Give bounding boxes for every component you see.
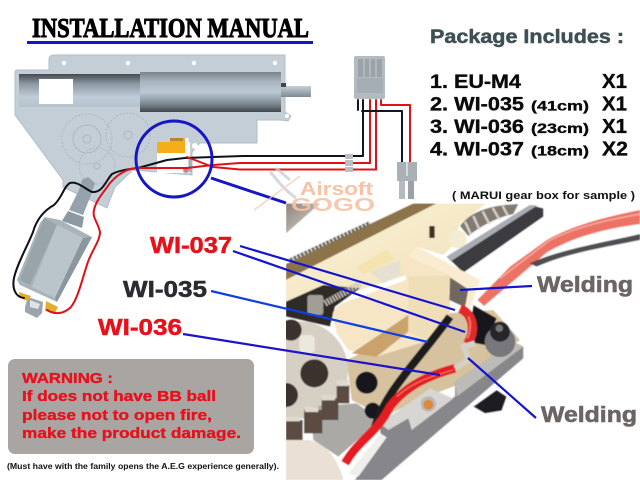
diagram: main connector xyxy=(354,56,385,99)
footer note: (Must have with the family opens the A.E.G experience generally). xyxy=(7,461,279,471)
label: WI-036: WI-036 xyxy=(98,314,182,340)
warning panel: please not to open fire, xyxy=(22,407,212,424)
photo of wired gearbox xyxy=(251,203,640,480)
diagram: motor xyxy=(17,177,95,318)
diagram: small connector xyxy=(397,162,417,199)
watermark: Airsoft GOGO xyxy=(291,179,375,215)
package list: (23cm) xyxy=(531,120,589,136)
package list: X1 xyxy=(602,71,627,93)
watermark: Airsoft GOGO: GOGO xyxy=(291,195,375,215)
label: WI-037: WI-037 xyxy=(150,232,232,258)
warning panel: make the product damage. xyxy=(22,425,241,442)
package list: X2 xyxy=(602,138,628,160)
callout lines: wire labels to photo xyxy=(183,246,536,418)
label: WI-035: WI-035 xyxy=(123,276,207,302)
label: Welding lower: Welding xyxy=(541,402,637,427)
package list: 2. WI-035 xyxy=(430,94,524,116)
warning panel: If does not have BB ball xyxy=(22,388,216,405)
package list: 4. WI-037 xyxy=(430,140,524,160)
diagram: gearbox shell xyxy=(15,55,311,208)
warning panel: WARNING : xyxy=(22,370,113,387)
warning panel xyxy=(8,359,254,454)
package list xyxy=(430,71,628,160)
diagram: wire clips xyxy=(345,154,353,172)
label: Welding upper: Welding xyxy=(537,272,633,297)
package includes heading: Package Includes : xyxy=(430,26,624,48)
watermark figure xyxy=(254,168,300,210)
package list: (41cm) xyxy=(531,98,589,114)
package list: 1. EU-M4 xyxy=(430,72,521,93)
package list: X1 xyxy=(602,94,627,116)
package list: (18cm) xyxy=(531,142,589,158)
title: INSTALLATION MANUAL xyxy=(32,13,309,43)
watermark: Airsoft GOGO: Airsoft xyxy=(300,179,373,199)
sample note: ( MARUI gear box for sample ) xyxy=(452,190,635,202)
package list: 3. WI-036 xyxy=(430,117,524,138)
diagram: switch assembly xyxy=(157,138,192,173)
package list: X1 xyxy=(602,116,627,138)
diagram: wiring from motor to connector xyxy=(13,100,410,313)
blue magnifier circle xyxy=(136,121,286,203)
